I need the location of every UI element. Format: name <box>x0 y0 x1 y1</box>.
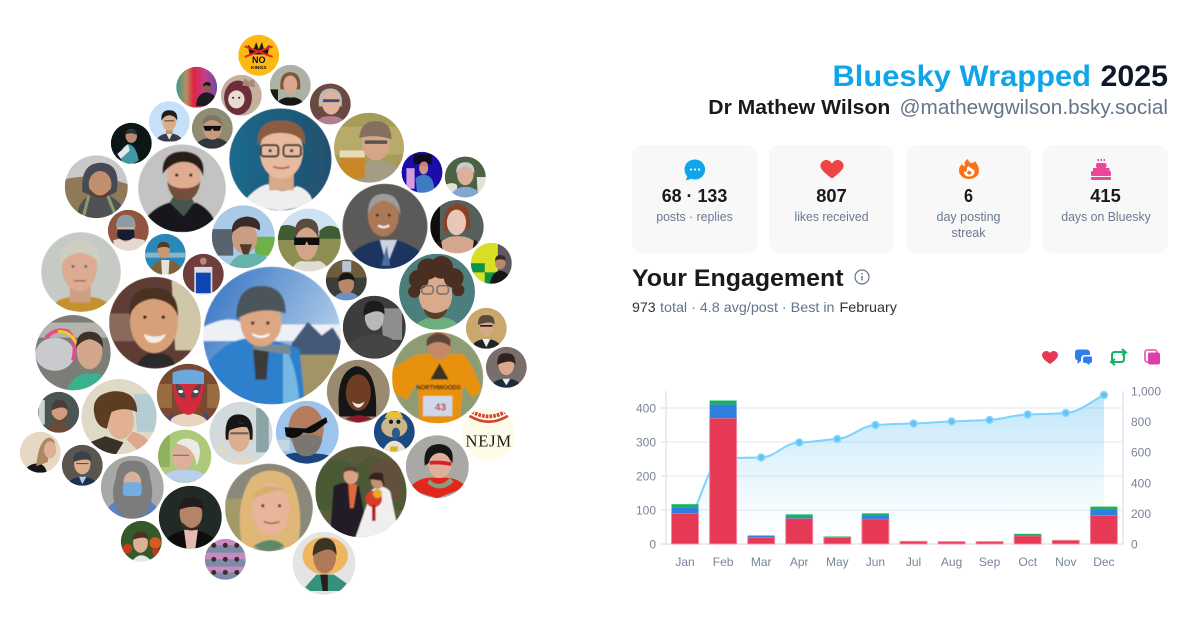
avatar: bearded man indoors <box>38 392 79 433</box>
avatar: man with unicorn balloon <box>35 315 111 390</box>
bubble cluster of followed accounts <box>20 35 527 595</box>
avatar: runner in orange tee: NORTHWOODS <box>417 386 461 392</box>
avatar: man with goatee at stadium <box>212 205 275 268</box>
engagement summary line: 973 <box>632 299 656 315</box>
stat card: likes received: likes received <box>794 210 869 224</box>
icon: info circle <box>855 270 869 284</box>
title: Bluesky Wrapped <box>832 60 1091 93</box>
avatar: Deadpool mask <box>157 364 220 427</box>
avatar: older woman with blue glasses <box>310 84 351 124</box>
month labels: Dec <box>1093 555 1115 569</box>
avatar: man with glasses in navy suit <box>62 445 103 486</box>
left axis labels: 400 <box>636 402 656 416</box>
avatar: blonde woman in profile <box>20 432 61 473</box>
icon: quote squares <box>1145 350 1160 364</box>
avatar: runner in orange tee <box>392 330 483 423</box>
month labels: Oct <box>1018 555 1038 569</box>
avatar: man with cap and beer <box>334 113 404 183</box>
stat card: likes received: 807 <box>816 185 847 206</box>
avatar: man in suit on light blue <box>149 101 190 142</box>
line markers <box>758 392 1107 461</box>
avatar: older man in navy suit <box>342 184 428 269</box>
engagement summary line: total · 4.8 avg/post · Best in <box>660 299 834 315</box>
heading: Your Engagement: Your Engagement <box>632 265 844 292</box>
avatar: man in cathedral <box>326 260 367 300</box>
avatar: man in black jacket and pink shirt <box>159 486 222 549</box>
avatar: NEJM journal logo <box>462 407 515 461</box>
avatar: hiker with beanie before mountains <box>203 266 341 404</box>
month labels: Jun <box>866 555 885 569</box>
avatar: grey-haired man <box>41 232 121 312</box>
month labels: Mar <box>751 555 772 569</box>
profile name and handle: @mathewgwilson.bsky.social <box>900 97 1168 119</box>
month labels: Jan <box>675 555 695 569</box>
avatar: No Kings logo <box>238 35 279 76</box>
avatar: woman with red glasses <box>406 435 469 498</box>
avatar: speaker on purple stage <box>402 152 442 193</box>
avatar: bald man in sunglasses with grey beard <box>276 401 339 464</box>
month labels: Apr <box>790 555 809 569</box>
bars: likes <box>672 418 1117 544</box>
avatar: wedding couple <box>315 446 407 537</box>
left axis labels: 300 <box>636 436 656 450</box>
stat card: likes received <box>769 145 894 253</box>
avatar: woman with glasses and black hair <box>210 402 272 465</box>
profile name and handle <box>708 97 1168 119</box>
avatar: figure behind blue display <box>183 254 224 295</box>
avatar: woman with red hair <box>430 200 484 253</box>
icon: repost arrows <box>1111 349 1126 365</box>
cumulative line <box>685 395 1104 526</box>
bars: reposts <box>672 400 1117 538</box>
avatar: woman with mask and beanie <box>108 210 149 251</box>
avatar: blond man with glasses in white tee <box>229 108 332 211</box>
cumulative area fill <box>685 395 1104 544</box>
month labels: Nov <box>1055 555 1076 569</box>
avatar: woman with short brown hair <box>81 379 157 454</box>
engagement summary line <box>632 299 897 315</box>
icon: replies chat bubbles <box>1075 350 1092 365</box>
avatar: painted portrait of man in green <box>292 532 356 595</box>
month labels: Feb <box>713 555 734 569</box>
icon: likes heart <box>1042 351 1058 364</box>
avatar: No Kings logo: KINGS <box>251 65 267 71</box>
month labels: Aug <box>941 555 962 569</box>
right axis labels: 400 <box>1131 476 1151 490</box>
avatar: doll with crown <box>221 75 262 116</box>
month labels: May <box>826 555 849 569</box>
avatar: smiling man close-up <box>109 277 201 369</box>
title: 2025 <box>1100 60 1168 93</box>
right axis labels: 600 <box>1131 446 1151 460</box>
avatar: tiled portrait pattern <box>205 539 246 580</box>
avatar: No Kings logo: NO <box>252 55 265 65</box>
avatar: white-haired man in light blue shirt <box>158 430 211 483</box>
stat card: day posting streak: 6 <box>964 185 973 206</box>
avatar: person before red gradient wall <box>176 67 217 108</box>
avatar: singer on stage <box>111 123 152 164</box>
stat card: day posting streak <box>906 145 1031 253</box>
stat card: day posting streak: streak <box>952 226 986 240</box>
left axis labels <box>636 402 656 552</box>
avatar: cartoon mascot <box>374 411 415 452</box>
avatar: man with glasses on tan <box>466 308 507 349</box>
right axis labels: 200 <box>1131 507 1151 521</box>
avatar: blonde woman close-up <box>225 464 313 552</box>
stat card: posts and replies <box>632 145 757 253</box>
avatar: man in suit on grey <box>486 347 527 388</box>
stat card: days on Bluesky: 415 <box>1090 185 1121 206</box>
stat card: days on Bluesky: days on Bluesky <box>1061 210 1151 224</box>
icon: heart <box>820 160 844 178</box>
avatar: man with black sunglasses in a field <box>278 208 341 272</box>
avatar: older man in blue checked shirt <box>445 156 486 198</box>
month labels: Jul <box>906 555 921 569</box>
icon: flame <box>959 159 979 179</box>
avatar: man with sunglasses <box>192 108 233 149</box>
avatar: wizard wig and blue face mask <box>101 456 164 519</box>
month labels: Sep <box>979 555 1001 569</box>
right axis labels: 1,000 <box>1131 384 1161 398</box>
bars: replies <box>672 405 1117 537</box>
avatar: man with curly hair and glasses <box>399 254 475 330</box>
avatar: woman with brown bob <box>270 65 311 106</box>
chart legend icons <box>1042 349 1160 365</box>
avatar: black and white photo of man <box>343 296 406 359</box>
right axis labels: 800 <box>1131 415 1151 429</box>
avatar: man at beach in plaid <box>145 234 186 275</box>
month labels <box>675 555 1115 569</box>
avatar: runner in orange tee: 43 <box>435 403 446 414</box>
icon: birthday cake <box>1091 159 1111 180</box>
avatar: smiling woman with braids <box>327 360 390 423</box>
avatar: bearded man in black jacket <box>138 144 226 232</box>
stat card: posts and replies: posts · replies <box>656 210 733 224</box>
avatar: man among orange flowers <box>121 521 162 562</box>
chart: monthly engagement stacked bars with cumulative line <box>636 384 1161 569</box>
stat card: posts and replies: 68 · 133 <box>662 185 727 206</box>
right axis labels <box>1131 384 1161 552</box>
stat card: day posting streak: day posting <box>936 210 1001 224</box>
engagement summary line: February <box>840 299 897 315</box>
stat card: days on Bluesky <box>1043 145 1168 253</box>
avatar: NEJM journal logo: NEJM <box>465 431 512 450</box>
left axis labels: 200 <box>636 470 656 484</box>
left axis labels: 0 <box>649 538 656 552</box>
icon: chat bubble <box>685 159 705 180</box>
avatar: hiker in hood <box>65 155 128 218</box>
profile name and handle: Dr Mathew Wilson <box>708 97 890 119</box>
left axis labels: 100 <box>636 504 656 518</box>
avatar: paramedic by yellow ambulance <box>471 243 512 284</box>
right axis labels: 0 <box>1131 538 1138 552</box>
